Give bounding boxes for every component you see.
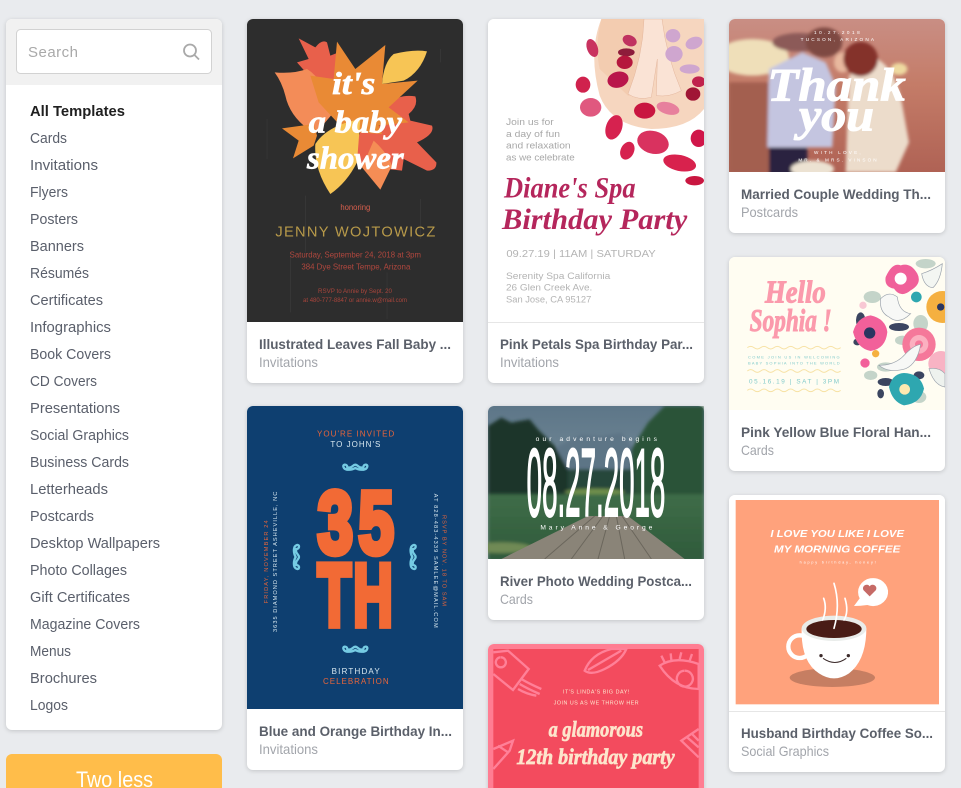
- thumbnail: autumn leaves on dark wood: it's: [332, 65, 375, 101]
- thumbnail: couple photo with Thank you: [729, 19, 945, 172]
- thumbnail: blue and orange 35TH: 35: [318, 474, 394, 573]
- thumbnail: couple photo with Thank you: you: [793, 91, 874, 141]
- card title: Married Couple Wedding Th...: [741, 186, 931, 202]
- thumbnail: river dock photo: our adventure begins: [536, 436, 658, 443]
- card: spa birthday invitation: [488, 19, 707, 383]
- thumbnail: autumn leaves on dark wood: 384 Dye Street Tempe, Arizona: [301, 262, 410, 272]
- template category list: Résumés: [30, 266, 89, 282]
- thumbnail: Hello Sophia floral: Hello: [764, 274, 826, 310]
- template category list: Banners: [30, 239, 84, 255]
- search box: Search: [28, 44, 78, 61]
- card: glamorous birthday party: [488, 644, 704, 788]
- thumbnail: pink petals and feet: Join us for: [506, 117, 554, 127]
- thumbnail: autumn leaves on dark wood: at 480-777-8847 or annie.w@mail.com: [303, 297, 407, 304]
- thumbnail: pink petals and feet: Diane's Spa: [503, 172, 636, 204]
- template category list: All Templates: [30, 104, 125, 120]
- card category: Cards: [500, 591, 533, 607]
- card category: Invitations: [259, 741, 318, 757]
- thumbnail: red glam invitation: 12th birthday party: [516, 744, 676, 769]
- thumbnail: couple photo with Thank you: 10.27.2018: [814, 30, 860, 35]
- thumbnail: red glam invitation: JOIN US AS WE THROW HER: [554, 701, 639, 707]
- icon: magnifier: [184, 44, 199, 60]
- template category list: Flyers: [30, 185, 68, 201]
- thumbnail: autumn leaves on dark wood: RSVP to Annie by Sept. 20: [318, 288, 392, 295]
- card title: Pink Yellow Blue Floral Han...: [741, 424, 931, 440]
- template category list: Logos: [30, 698, 68, 714]
- template category list: Letterheads: [30, 482, 108, 498]
- thumbnail: pink petals and feet: and relaxation: [506, 141, 571, 151]
- panel: sidebar: [6, 19, 222, 730]
- thumbnail: couple photo with Thank you: Thank: [767, 60, 906, 112]
- thumbnail: coffee cup greeting: happy birthday, honey!: [800, 560, 876, 564]
- thumbnail: blue and orange 35TH: AT 828-483-4339 SAMLEE@MAIL.COM: [432, 494, 438, 628]
- template category list: [30, 104, 160, 714]
- thumbnail: couple photo with Thank you: WITH LOVE,: [814, 150, 861, 155]
- card: wedding thank you: [716, 19, 945, 233]
- template category list: Certificates: [30, 293, 103, 309]
- card title: Blue and Orange Birthday In...: [259, 723, 452, 739]
- thumbnail: autumn leaves on dark wood: [247, 19, 463, 322]
- thumbnail: blue and orange 35TH: CELEBRATION: [323, 677, 389, 686]
- card title: River Photo Wedding Postca...: [500, 573, 692, 589]
- thumbnail: red glam invitation: a glamorous: [549, 717, 643, 742]
- thumbnail: blue and orange 35TH: RSVP BY NOV. 18 TO SAM: [441, 515, 447, 606]
- thumbnail: blue and orange 35TH: YOU'RE INVITED: [317, 430, 395, 439]
- card title: Illustrated Leaves Fall Baby ...: [259, 336, 451, 352]
- thumbnail: pink petals and feet: a day of fun: [506, 129, 560, 139]
- thumbnail: pink petals and feet: [501, 19, 704, 304]
- template category list: Postcards: [30, 509, 94, 525]
- card title: Husband Birthday Coffee So...: [741, 725, 933, 741]
- card: 35th birthday invitation: [247, 406, 463, 770]
- thumbnail: red glam invitation: [488, 644, 704, 788]
- icon: heart speech bubble: [854, 578, 888, 606]
- card: baby shower invitation: [247, 19, 463, 383]
- template category list: Cards: [30, 131, 67, 147]
- thumbnail: red glam invitation: IT'S LINDA'S BIG DAY!: [563, 689, 629, 695]
- thumbnail: Hello Sophia floral: Sophia !: [750, 302, 832, 338]
- card: river wedding postcard: [471, 406, 704, 620]
- thumbnail: pink petals and feet: 09.27.19 | 11AM | SATURDAY: [506, 249, 656, 260]
- thumbnail: autumn leaves on dark wood: Saturday, September 24, 2018 at 3pm: [290, 250, 421, 260]
- thumbnail: pink petals and feet: 26 Glen Creek Ave.: [506, 283, 592, 293]
- card: coffee birthday social graphic: [729, 495, 945, 772]
- thumbnail: coffee cup greeting: [736, 500, 939, 704]
- template category list: Invitations: [30, 158, 98, 174]
- card: floral hand-drawn card: [729, 257, 958, 471]
- card category: Invitations: [500, 354, 559, 370]
- thumbnail: blue and orange 35TH: TO JOHN'S: [330, 440, 380, 449]
- thumbnail: Hello Sophia floral: COME JOIN US IN WELCOMING: [748, 354, 840, 359]
- template category list: Business Cards: [30, 455, 129, 471]
- thumbnail: blue and orange 35TH: FRIDAY, NOVEMBER 24: [264, 520, 270, 603]
- card category: Social Graphics: [741, 743, 829, 759]
- icon: coffee cup: [788, 583, 875, 687]
- template category list: Posters: [30, 212, 78, 228]
- thumbnail: autumn leaves on dark wood: JENNY WOJTOWICZ: [275, 224, 435, 240]
- thumbnail: Hello Sophia floral: 05.16.19 | SAT | 3PM: [749, 379, 839, 386]
- template category list: Presentations: [30, 401, 120, 417]
- card category: Cards: [741, 442, 774, 458]
- template category list: Desktop Wallpapers: [30, 536, 160, 552]
- search box: [16, 30, 212, 74]
- thumbnail: pink petals and feet: Birthday Party: [501, 204, 688, 236]
- thumbnail: Hello Sophia floral: BABY SOPHIA INTO THE WORLD: [748, 360, 840, 365]
- thumbnail: coffee cup greeting: I LOVE YOU LIKE I LOVE: [770, 529, 905, 540]
- template category list: Photo Collages: [30, 563, 127, 579]
- card category: Postcards: [741, 204, 798, 220]
- thumbnail: autumn leaves on dark wood: shower: [306, 139, 404, 175]
- thumbnail: autumn leaves on dark wood: honoring: [340, 202, 370, 212]
- panel: yellow promo: [6, 754, 222, 788]
- thumbnail: blue and orange 35TH: [247, 406, 463, 709]
- template category list: Menus: [30, 644, 71, 660]
- thumbnail: couple photo with Thank you: MR. & MRS. VINSON: [798, 157, 877, 162]
- thumbnail: blue and orange 35TH: TH: [318, 545, 393, 645]
- template category list: Brochures: [30, 671, 97, 687]
- thumbnail: river dock photo: Mary Anne & George: [540, 524, 653, 531]
- template category list: Infographics: [30, 320, 111, 336]
- template category list: Gift Certificates: [30, 590, 130, 606]
- thumbnail: pink petals and feet: Serenity Spa California: [506, 271, 610, 281]
- thumbnail: blue and orange 35TH: BIRTHDAY: [332, 667, 380, 676]
- template category list: Magazine Covers: [30, 617, 140, 633]
- thumbnail: blue and orange 35TH: 3635 DIAMOND STREET ASHEVILLE, NC: [273, 492, 279, 632]
- template category list: CD Covers: [30, 374, 97, 390]
- card title: Pink Petals Spa Birthday Par...: [500, 336, 693, 352]
- card category: Invitations: [259, 354, 318, 370]
- thumbnail: coffee cup greeting: MY MORNING COFFEE: [774, 544, 902, 555]
- template category list: Book Covers: [30, 347, 111, 363]
- thumbnail: autumn leaves on dark wood: a baby: [309, 103, 403, 139]
- thumbnail: pink petals and feet: San Jose, CA 95127: [506, 294, 591, 304]
- thumbnail: couple photo with Thank you: TUCSON, ARIZONA: [801, 37, 875, 42]
- thumbnail: Hello Sophia floral: [729, 257, 945, 410]
- template category list: Social Graphics: [30, 428, 129, 444]
- thumbnail: river dock photo: [488, 406, 704, 559]
- thumbnail: pink petals and feet: as we celebrate: [506, 153, 575, 163]
